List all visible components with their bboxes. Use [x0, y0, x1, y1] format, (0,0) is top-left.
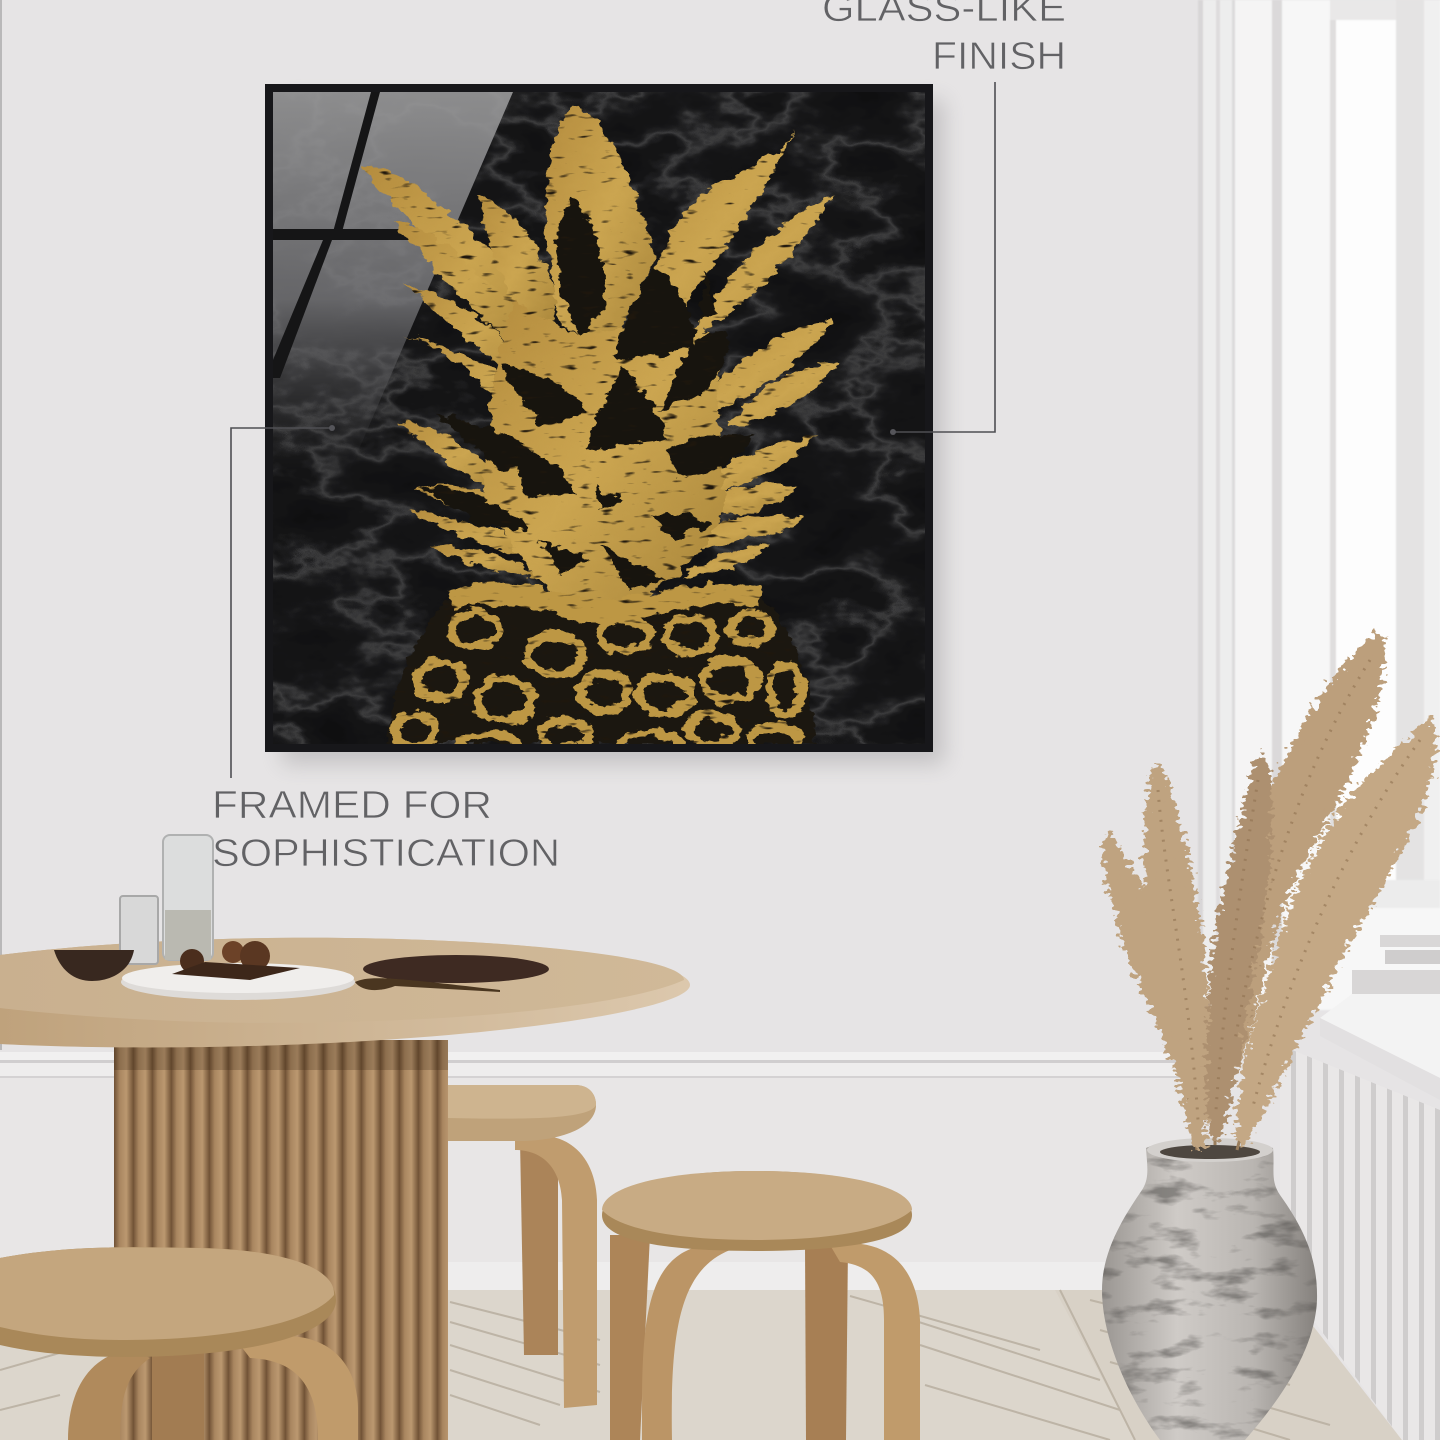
dark bowl	[54, 950, 134, 981]
window reflection glare	[273, 92, 513, 470]
radiator	[1280, 1045, 1440, 1440]
callout: glass-like finish: FINISH	[932, 35, 1066, 78]
callout leader line	[893, 82, 995, 432]
round table top	[0, 938, 690, 1048]
stems	[1160, 880, 1335, 1150]
glass carafe	[163, 835, 213, 960]
callout label: FRAMED FOR	[212, 784, 492, 827]
window frame and reveal	[1198, 0, 1440, 1045]
ceramic vase	[1102, 1138, 1317, 1440]
dark leaf shading	[420, 195, 755, 590]
black marble canvas	[273, 92, 925, 744]
crown leaves	[360, 105, 838, 605]
central crown mass	[482, 300, 725, 605]
callout: framed for sophistication: SOPHISTICATION	[212, 832, 560, 875]
wooden plate	[363, 955, 549, 983]
pampas grass	[1109, 640, 1429, 1150]
callout: framed for sophistication	[212, 425, 560, 875]
back stool	[448, 1085, 597, 1408]
front right stool	[602, 1171, 920, 1440]
front left stool	[0, 1247, 358, 1440]
picture shadow	[282, 100, 944, 764]
frame	[265, 84, 933, 752]
drinking glass	[120, 896, 158, 964]
fluted table base	[114, 1040, 448, 1440]
callout leader line	[231, 428, 332, 778]
pineapple artwork	[360, 105, 838, 762]
marble plate with nuts	[121, 941, 355, 1000]
window sill with books	[1320, 935, 1440, 1100]
fruit body dark base	[386, 585, 816, 744]
floor	[0, 1290, 1402, 1440]
spoon	[355, 978, 500, 992]
wainscot rail and lower wall	[0, 1052, 1200, 1290]
plumes	[1109, 640, 1429, 1145]
callout: glass-like finish	[822, 0, 1066, 435]
plume strands	[1158, 660, 1420, 1120]
framed artwork	[265, 84, 933, 762]
fruit scale rings	[395, 593, 801, 762]
